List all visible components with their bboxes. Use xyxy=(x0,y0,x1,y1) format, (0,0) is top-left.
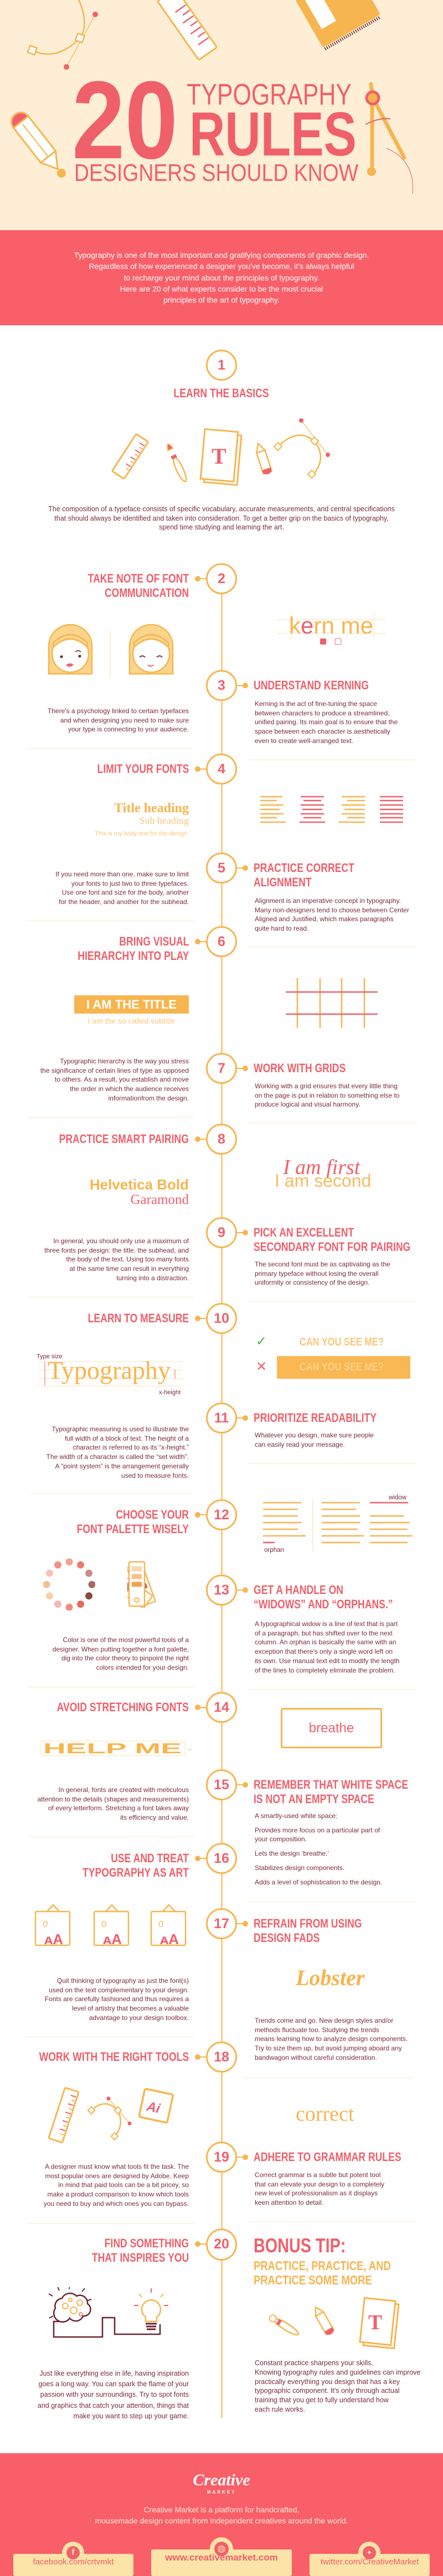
text 19: Correct grammar is a subtle but potent tool xyxy=(255,2171,380,2179)
text bonus: training that you get to fully understand how xyxy=(255,2396,389,2404)
text 13: its own. Use manual text edit to modify the length xyxy=(255,1657,399,1665)
title: 20 xyxy=(72,59,178,182)
heading 12 xyxy=(77,1508,189,1536)
text 3: even to create well-arranged text. xyxy=(255,737,353,745)
icon: bezier curve xyxy=(28,0,98,70)
header xyxy=(0,0,443,230)
text 13: of the lines to completely eliminate the problem. xyxy=(255,1666,395,1674)
text 20: goes a long way. You can spark the flame of your xyxy=(39,2380,189,2388)
kern me graphic: kern me xyxy=(289,612,373,638)
icon: ruler xyxy=(157,0,217,60)
text bonus: Constant practice sharpens your skills. xyxy=(255,2359,373,2367)
step 19 xyxy=(236,2154,248,2160)
text: 8 xyxy=(218,1131,225,1147)
text 4: If you need more than one, make sure to limit xyxy=(55,870,189,878)
step 6 xyxy=(195,939,207,944)
intro band: to recharge your mind about the principles of typography. xyxy=(123,273,320,282)
text 20: passion with your surroundings. Try to spot fonts xyxy=(40,2391,189,2398)
text: 16 xyxy=(214,1851,229,1866)
text 7: Working with a grid ensures that every little thing xyxy=(255,1082,398,1090)
text 18: A designer must know what tools fit the task. The xyxy=(45,2163,189,2170)
text 1: that should always be identified and taken into consideration. To get a better grip on the basics of typography, xyxy=(54,515,389,522)
text 4 xyxy=(55,870,189,906)
icon: tools xyxy=(44,2086,177,2146)
heading 18: WORK WITH THE RIGHT TOOLS xyxy=(39,2050,189,2064)
text bonus: Knowing typography rules and guidelines can improve xyxy=(255,2369,421,2376)
link: facebook: f xyxy=(71,2548,75,2557)
text 5: quite hard to read. xyxy=(255,925,308,932)
step 15 xyxy=(236,1782,248,1788)
intro band: principles of the art of typography. xyxy=(163,295,280,304)
footer xyxy=(0,2453,443,2576)
icon: art frames: ᴀA xyxy=(103,1931,122,1947)
intro band: Regardless of how experienced a designer you've become, it's always helpful xyxy=(89,262,354,271)
heading 12: FONT PALETTE WISELY xyxy=(77,1522,189,1536)
text 5: Aligned and Justified, which makes paragraphs xyxy=(255,915,394,923)
widows/orphans graphic: orphan xyxy=(264,1547,284,1554)
text 12: colors intended for your design. xyxy=(96,1664,189,1671)
text 12: dig into the color theory to pinpoint the right xyxy=(61,1654,189,1662)
step 7 xyxy=(236,1066,248,1071)
heading 13: “WIDOWS” AND “ORPHANS.” xyxy=(254,1597,393,1611)
text 10: The width of a character is called the “set width”. xyxy=(47,1453,189,1461)
heading 5: ALIGNMENT xyxy=(254,875,312,889)
icon: art frames: 0 xyxy=(158,1920,163,1929)
text 18 xyxy=(44,2162,189,2209)
icons: basics xyxy=(112,418,330,486)
text bonus: practically everything you design that has a key xyxy=(255,2378,400,2386)
text: 20 xyxy=(214,2236,229,2252)
step 17 xyxy=(236,1921,248,1926)
text 9: uniformity or consistency of the design. xyxy=(255,1279,369,1286)
widows/orphans graphic xyxy=(263,1494,413,1554)
heading 11: PRIORITIZE READABILITY xyxy=(254,1411,377,1425)
heading 2 xyxy=(87,572,189,600)
footer text: mousemade design content from independent creatives around the world. xyxy=(95,2516,348,2525)
heading 13: GET A HANDLE ON xyxy=(254,1583,343,1597)
step 2 xyxy=(195,576,207,581)
text 1 xyxy=(48,505,395,531)
text 9: The second font must be as captivating as the xyxy=(255,1260,390,1268)
step 4 xyxy=(195,766,207,772)
step 1 circle: 1 xyxy=(218,357,225,373)
icons: bonus tools: T xyxy=(368,2311,382,2334)
heading 7: WORK WITH GRIDS xyxy=(254,1061,346,1075)
text 7 xyxy=(255,1082,400,1108)
step 13 xyxy=(236,1587,248,1593)
link: facebook xyxy=(13,2549,133,2576)
text bonus: typographic component. It's only through actual xyxy=(255,2387,400,2395)
text 15: Stabilizes design components. xyxy=(255,1864,344,1872)
step 16 xyxy=(195,1856,207,1861)
text 10 xyxy=(47,1425,189,1479)
step 9 xyxy=(236,1230,248,1235)
icon: tools: Ai xyxy=(145,2099,162,2117)
text 13: A typographical widow is a line of text that is part xyxy=(255,1620,398,1628)
title: DESIGNERS SHOULD KNOW xyxy=(74,159,358,186)
heading 6: BRING VISUAL xyxy=(119,934,189,948)
heading 15 xyxy=(254,1778,443,1806)
text 9: primary typeface without losing the overall xyxy=(255,1270,378,1277)
footer text xyxy=(0,2505,443,2526)
widows/orphans graphic: widow xyxy=(388,1494,407,1501)
icon: art frames: ᴀA xyxy=(160,1931,179,1947)
text: 7 xyxy=(218,1061,225,1076)
font hierarchy sample: This is my body text for the design. xyxy=(95,830,189,837)
text 6: to others. As a result, you establish and move xyxy=(55,1076,189,1083)
bonus tip heading xyxy=(254,2235,425,2287)
text 13: column. An orphan is basically the same with an xyxy=(255,1638,396,1646)
text 17 xyxy=(255,2016,408,2063)
pairing sample: Garamond xyxy=(130,1192,189,1207)
text 19: new level of professionalism as it displays xyxy=(255,2189,378,2197)
readability sample: ✓ xyxy=(256,1334,267,1349)
link: facebook: facebook.com/crtvmkt xyxy=(33,2557,114,2567)
heading 9 xyxy=(254,1225,410,1254)
text 17: methods fluctuate too. Studying the trends xyxy=(255,2026,379,2034)
stretched text sample: ↔ xyxy=(187,1746,192,1752)
bonus tip heading: PRACTICE SOME MORE xyxy=(254,2273,372,2287)
step 12 xyxy=(195,1512,207,1518)
icon: art frames: ᴀA xyxy=(44,1931,63,1947)
text: 12 xyxy=(214,1507,229,1523)
text 5 xyxy=(255,897,409,932)
text 16: Fonts are carefully fashioned and thus requires a xyxy=(45,1995,189,2003)
pairing sample: Helvetica Bold xyxy=(90,1176,189,1193)
footer text: Creative Market is a platform for handcrafted, xyxy=(144,2505,299,2514)
kern me graphic xyxy=(277,612,385,645)
text 10: used to measure fonts. xyxy=(121,1472,189,1479)
text 11: Whatever you design, make sure people xyxy=(255,1431,374,1439)
font hierarchy sample: Sub heading xyxy=(140,815,189,826)
icon: art frames xyxy=(33,1902,188,1947)
correct sample: correct xyxy=(296,2102,354,2126)
text 11: can easily read your message. xyxy=(255,1441,345,1448)
heading 2: TAKE NOTE OF FONT xyxy=(87,572,189,585)
text bonus: each rule works. xyxy=(255,2406,305,2413)
heading 12: CHOOSE YOUR xyxy=(116,1508,189,1521)
icon: color wheel xyxy=(43,1559,95,1611)
icon: grid xyxy=(286,978,378,1028)
text 11 xyxy=(255,1431,374,1448)
text 16: advantage to your design toolbox. xyxy=(89,2014,189,2022)
step 20 xyxy=(195,2241,207,2247)
step 10 xyxy=(195,1316,207,1321)
text 17: means learning how to analyze design components. xyxy=(255,2035,408,2043)
intro band xyxy=(0,230,443,325)
text 10: full width of a block of text. The height of a xyxy=(65,1435,189,1442)
text 14: its efficiency and value. xyxy=(120,1814,189,1821)
text 14: In general, fonts are created with meticulous xyxy=(59,1786,189,1794)
text 19: keen attention to detail. xyxy=(255,2199,323,2206)
text: 10 xyxy=(214,1311,229,1326)
logo xyxy=(0,2471,443,2495)
text 18: you need to buy and which ones you can bypass. xyxy=(44,2200,189,2208)
heading 14: AVOID STRETCHING FONTS xyxy=(57,1700,189,1714)
title box sample: I am the so called subtitle xyxy=(87,1016,175,1025)
title box sample: I AM THE TITLE xyxy=(86,998,177,1011)
heading 2: COMMUNICATION xyxy=(105,586,189,600)
title: RULES xyxy=(189,100,357,169)
font hierarchy sample xyxy=(95,801,189,837)
text 8: turning into a distraction. xyxy=(116,1274,189,1282)
heading 17: REFRAIN FROM USING xyxy=(254,1917,362,1930)
timeline line xyxy=(221,575,223,2418)
text 3: unified pairing. Its main goal is to ensure that the xyxy=(255,718,398,726)
text 17: bandwagon without careful consideration. xyxy=(255,2054,377,2061)
text 16: Quit thinking of typography as just the font(s) xyxy=(57,1977,189,1985)
heading 17 xyxy=(254,1917,389,1945)
icon: faces xyxy=(48,624,174,676)
text 17: Try to size them up, but avoid jumping aboard any xyxy=(255,2044,402,2052)
stretched text sample xyxy=(40,1739,200,1757)
text 20: Just like everything else in life, having inspiration xyxy=(39,2370,189,2377)
text: 5 xyxy=(218,860,225,876)
text 15 xyxy=(255,1811,382,1887)
icons: bonus tools xyxy=(264,2296,402,2349)
text 14: of every letterform. Stretching a font takes away xyxy=(48,1804,189,1812)
step 8 xyxy=(195,1136,207,1142)
link: website: www.creativemarket.com xyxy=(165,2552,278,2563)
intro band: Here are 20 of what experts consider to be the most crucial xyxy=(120,284,323,293)
text 17: Trends come and go. New design styles and/or xyxy=(255,2017,393,2024)
logo: Creative xyxy=(193,2471,250,2489)
heading 13 xyxy=(254,1583,393,1611)
title: TYPOGRAPHY xyxy=(187,78,352,111)
heading 15: IS NOT AN EMPTY SPACE xyxy=(254,1792,374,1806)
text: 13 xyxy=(214,1582,229,1598)
text 8: In general, you should only use a maximum of xyxy=(53,1237,189,1245)
text 13: exception that there's only a single word left on xyxy=(255,1648,393,1655)
text 3: space between each character is aesthetically xyxy=(255,728,390,735)
text 15: Adds a level of sophistication to the design. xyxy=(255,1878,382,1886)
readability sample xyxy=(256,1334,410,1379)
heading 19: ADHERE TO GRAMMAR RULES xyxy=(254,2150,401,2164)
text 19: that can elevate your design to a completely xyxy=(255,2180,384,2188)
text 16: used on the text complementary to your design. xyxy=(49,1986,189,1994)
step 18 xyxy=(195,2054,207,2060)
text 8: three fonts per design: the title, the subhead, and xyxy=(44,1247,189,1254)
text 3: between characters to produce a streamlined, xyxy=(255,709,389,717)
text: 14 xyxy=(214,1700,229,1715)
heading 9: PICK AN EXCELLENT xyxy=(254,1225,354,1239)
step 11 xyxy=(236,1415,248,1421)
text 7: produce logical and visual harmony. xyxy=(255,1100,360,1108)
text 14 xyxy=(38,1785,189,1822)
text 9 xyxy=(255,1260,390,1286)
text 18: in mind that paid tools can be a bit pricey, so xyxy=(58,2181,189,2189)
pairing sample xyxy=(90,1176,189,1207)
breathe box xyxy=(281,1708,382,1748)
text 8 xyxy=(44,1237,189,1282)
text 2 xyxy=(48,707,189,733)
readability sample: ✕ xyxy=(256,1359,267,1374)
text 20 xyxy=(38,2369,189,2422)
text 8: the body of the text. Using too many fonts xyxy=(66,1255,189,1263)
icon: compass xyxy=(371,84,404,166)
title box sample xyxy=(74,995,189,1025)
title xyxy=(72,59,358,186)
heading 1: LEARN THE BASICS xyxy=(174,386,269,400)
breathe box: breathe xyxy=(309,1721,354,1736)
text 8: at the same time can result in everything xyxy=(70,1265,189,1273)
heading 5: PRACTICE CORRECT xyxy=(254,861,354,875)
heading 8: PRACTICE SMART PAIRING xyxy=(59,1132,189,1146)
heading 5 xyxy=(254,861,354,889)
heading 6: HIERARCHY INTO PLAY xyxy=(78,949,189,963)
text 10: Typographic measuring is used to illustrate the xyxy=(52,1425,189,1433)
heading 20 xyxy=(68,2236,189,2265)
text 6: Typographic hierarchy is the way you stress xyxy=(60,1057,189,1065)
link: twitter: twitter.com/CreativeMarket xyxy=(321,2557,419,2567)
text: 18 xyxy=(214,2049,229,2065)
text 4: Use one font and size for the body, another xyxy=(62,889,189,896)
text 13: of a paragraph, but has shifted over to the next xyxy=(255,1629,393,1637)
heading 6 xyxy=(78,934,189,963)
heading 16 xyxy=(56,1851,189,1880)
heading 20: THAT INSPIRES YOU xyxy=(92,2251,189,2265)
text: 6 xyxy=(218,934,225,949)
readability sample: CAN YOU SEE ME? xyxy=(300,1336,384,1348)
text 10: A “point system” is the arrangement generally xyxy=(55,1462,189,1470)
text: 19 xyxy=(214,2149,229,2165)
text 15: A smartly-used white space: xyxy=(255,1812,337,1820)
text 3 xyxy=(255,700,398,745)
script pairing sample xyxy=(275,1156,371,1191)
logo: MARKET xyxy=(207,2490,236,2495)
link: twitter: ✦ xyxy=(367,2548,372,2557)
typography measure sample: x-height xyxy=(159,1389,181,1396)
text 18: most popular ones are designed by Adobe. Keep xyxy=(45,2172,189,2180)
text 4: your fonts to just two to three typefaces. xyxy=(71,880,189,887)
lobster sample: Lobster xyxy=(296,1965,364,1990)
text 7: on the page is put in relation to something else to xyxy=(255,1092,400,1099)
text 6: informationfrom the design. xyxy=(109,1094,189,1102)
heading 10: LEARN TO MEASURE xyxy=(87,1311,189,1325)
icon: alignment xyxy=(260,796,403,823)
typography measure sample xyxy=(37,1353,183,1396)
text 6: the order in which the audience receives xyxy=(70,1085,189,1093)
text 12 xyxy=(53,1636,189,1671)
text 12: Color is one of the most powerful tools of a xyxy=(63,1636,189,1644)
text 10: character is referred to as its “x-height.” xyxy=(73,1443,189,1451)
icon: brain to bulb xyxy=(48,2287,169,2340)
text 15: your composition. xyxy=(255,1835,307,1843)
heading 17: DESIGN FADS xyxy=(254,1931,320,1945)
heading 16: TYPOGRAPHY AS ART xyxy=(83,1866,189,1879)
text bonus xyxy=(255,2359,421,2414)
icon: art frames: 0 xyxy=(43,1920,48,1929)
text 19 xyxy=(255,2170,384,2208)
icon: pencil xyxy=(8,109,65,175)
text 13 xyxy=(255,1620,399,1674)
text: 17 xyxy=(214,1916,229,1931)
icon: orange book xyxy=(295,0,382,49)
icons: basics: T xyxy=(212,444,226,469)
step 3 xyxy=(236,683,248,688)
typography measure sample: Type size xyxy=(37,1353,62,1360)
text 16 xyxy=(45,1976,189,2023)
text 3: Kerning is the act of fine-tuning the space xyxy=(255,700,377,708)
text 6 xyxy=(40,1057,189,1102)
text 14: attention to the details (shapes and measurements) xyxy=(38,1795,189,1803)
text 20: and graphics that catch your attention, things that xyxy=(38,2402,189,2409)
text 5: Alignment is an imperative concept in typography. xyxy=(255,897,401,905)
readability sample: CAN YOU SEE ME? xyxy=(300,1361,384,1373)
heading 16: USE AND TREAT xyxy=(111,1851,189,1865)
text 16: level of artistry that becomes a valuable xyxy=(72,2004,189,2012)
text 15: Provides more focus on a particular part of xyxy=(255,1826,380,1834)
font hierarchy sample: Title heading xyxy=(114,801,189,816)
text 2: your type is connecting to your audience. xyxy=(68,725,189,733)
text 6: the significance of certain lines of type as opposed xyxy=(40,1067,189,1074)
text 1: The composition of a typeface consists of specific vocabulary, accurate measurements, and central specifications xyxy=(48,505,395,513)
step 14 xyxy=(195,1705,207,1710)
text 1: spend time studying and learning the art. xyxy=(159,523,284,531)
bonus tip heading: BONUS TIP: xyxy=(254,2234,346,2257)
text 20: make you want to step up your game. xyxy=(74,2412,189,2420)
text 5: Many non-designers tend to choose between Center xyxy=(255,906,409,914)
heading 20: FIND SOMETHING xyxy=(104,2236,189,2250)
text: 11 xyxy=(214,1410,229,1426)
heading 4: LIMIT YOUR FONTS xyxy=(97,762,189,776)
icon: art frames: 0 xyxy=(101,1920,106,1929)
intro band: Typography is one of the most important and gratifying components of graphic design. xyxy=(74,251,369,259)
text: 3 xyxy=(218,678,225,693)
text 12: designer. When putting together a font palette, xyxy=(53,1645,189,1653)
link: website xyxy=(151,2545,292,2576)
heading 3: UNDERSTAND KERNING xyxy=(254,678,369,692)
step 5 xyxy=(236,865,248,871)
text: 2 xyxy=(218,571,225,586)
text: 9 xyxy=(218,1225,225,1240)
text: 4 xyxy=(218,761,225,777)
bonus tip heading: PRACTICE, PRACTICE, AND xyxy=(254,2258,391,2273)
text 15: Lets the design ‘breathe.’ xyxy=(255,1850,329,1857)
heading 15: REMEMBER THAT WHITE SPACE xyxy=(254,1778,408,1791)
icon: swatch fan xyxy=(127,1561,156,1608)
text 18: make a product comparison to know which tools xyxy=(48,2190,189,2198)
script pairing sample: I am second xyxy=(275,1171,371,1191)
text 2: and when designing you need to make sure xyxy=(60,716,189,724)
link: twitter xyxy=(310,2549,430,2576)
text: 15 xyxy=(214,1777,229,1793)
heading 9: SECONDARY FONT FOR PAIRING xyxy=(254,1240,410,1254)
stretched text sample: HELP ME xyxy=(43,1740,182,1757)
text 4: for the header, and another for the subhead. xyxy=(59,898,189,906)
typography measure sample: Typography xyxy=(48,1356,171,1384)
text 2: There's a psychology linked to certain typefaces xyxy=(48,707,189,715)
link: website: ◍ xyxy=(218,2543,225,2554)
script pairing sample: I am first xyxy=(283,1156,360,1179)
step 1 circle xyxy=(206,350,237,381)
